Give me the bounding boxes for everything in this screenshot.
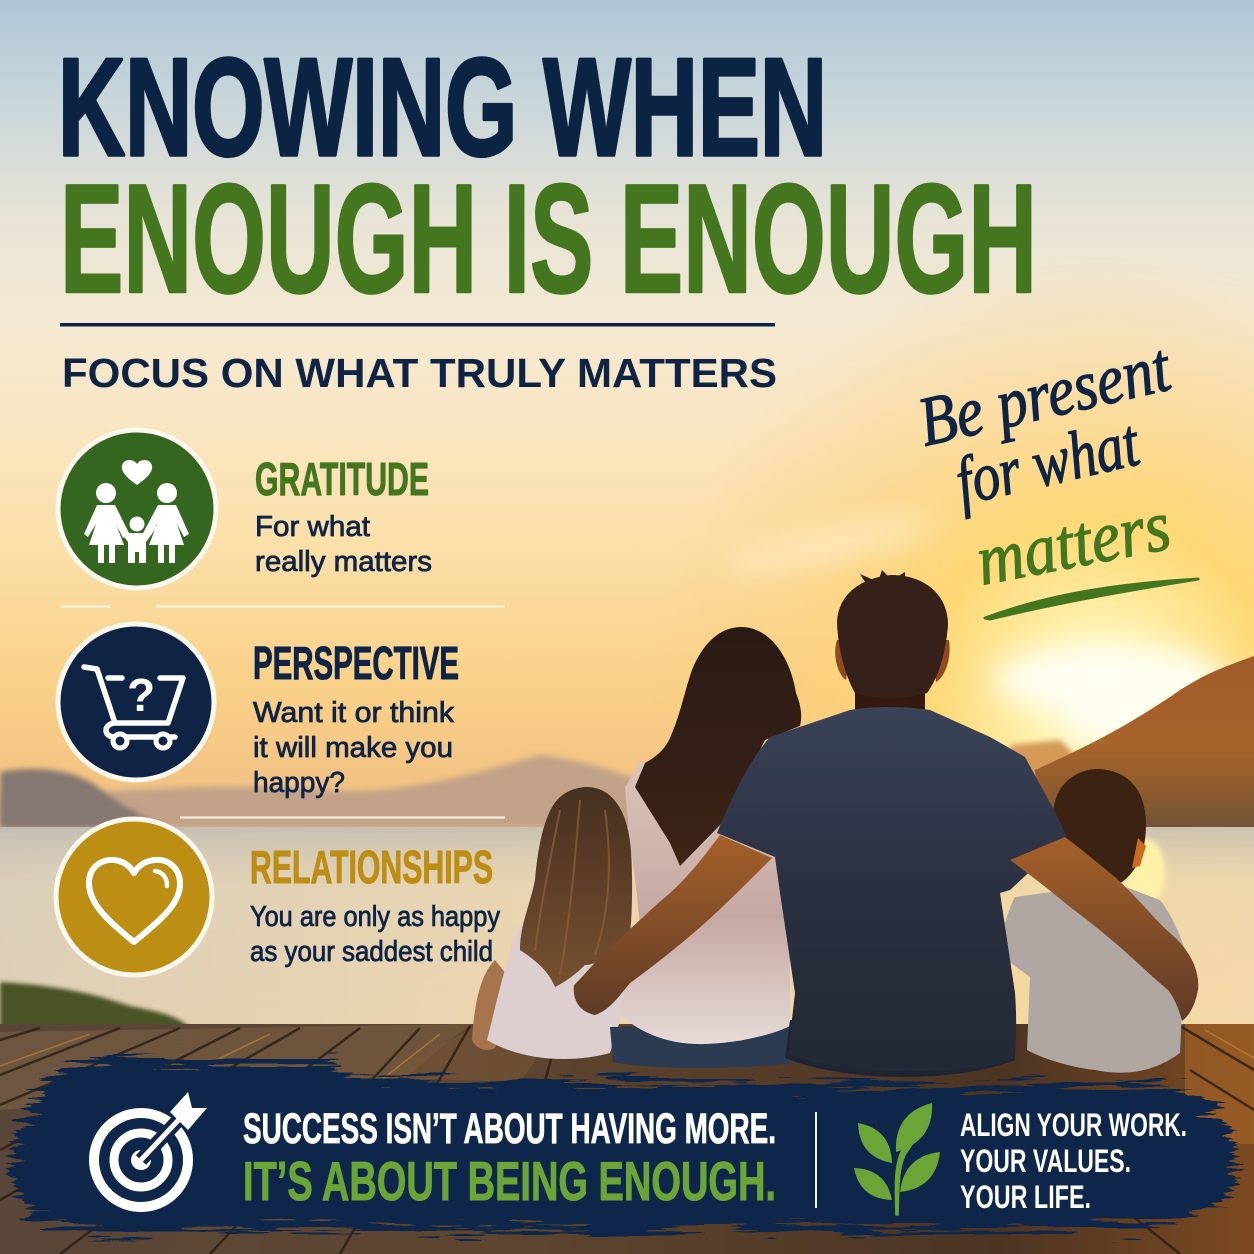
background: shoreline grass [0,982,192,1032]
message [243,1105,776,1212]
background: wooden dock [0,1024,1254,1254]
item: perspective [58,624,459,799]
subtitle with rule [60,323,777,396]
tagline: YOUR VALUES. [960,1143,1131,1179]
background: sunset sky [0,0,1254,840]
message: IT’S ABOUT BEING ENOUGH. [243,1150,776,1212]
boy [1000,769,1185,1073]
item: relationships: RELATIONSHIPS [250,841,493,893]
icon: family with heart [58,430,216,588]
banner: bottom brush panel [10,1058,1240,1234]
icon: shopping cart with question mark [58,624,214,780]
tagline: YOUR LIFE. [960,1179,1091,1215]
background: lake [0,827,1254,1032]
handwritten quote [911,329,1198,619]
message: SUCCESS ISN’T ABOUT HAVING MORE. [243,1105,776,1153]
icon: shopping cart with question mark: ? [127,669,155,721]
item: perspective: happy? [253,767,345,799]
item: gratitude [58,430,432,588]
icon: green sprout [854,1103,940,1215]
item: relationships [56,819,500,975]
tagline [960,1107,1187,1215]
item: gratitude: For what [255,511,370,543]
brush stroke background [10,1058,1240,1234]
subtitle with rule: FOCUS ON WHAT TRULY MATTERS [62,350,777,396]
item: perspective: PERSPECTIVE [253,637,459,689]
item: perspective: it will make you [253,732,453,764]
item: gratitude: really matters [255,546,432,578]
item: perspective: Want it or think [253,697,455,729]
title: KNOWING WHEN [58,30,827,185]
woman [610,627,801,1068]
item: relationships: as your saddest child [250,936,493,968]
icon: heart outline [56,819,212,975]
background: distant mountains [0,740,1090,828]
girl [472,787,632,1059]
background: right mountain [1035,656,1254,832]
photo: family sitting on the dock [472,570,1198,1077]
handwritten quote: for what [948,404,1147,520]
item: gratitude: GRATITUDE [255,453,429,505]
icon: target with arrow [94,1092,207,1207]
man [574,570,1198,1077]
handwritten quote: Be present [911,329,1178,462]
handwritten quote: matters [970,485,1176,601]
item: relationships: You are only as happy [250,901,500,933]
title [58,30,1037,325]
man's arms [574,835,772,1015]
divider lines [60,606,505,818]
